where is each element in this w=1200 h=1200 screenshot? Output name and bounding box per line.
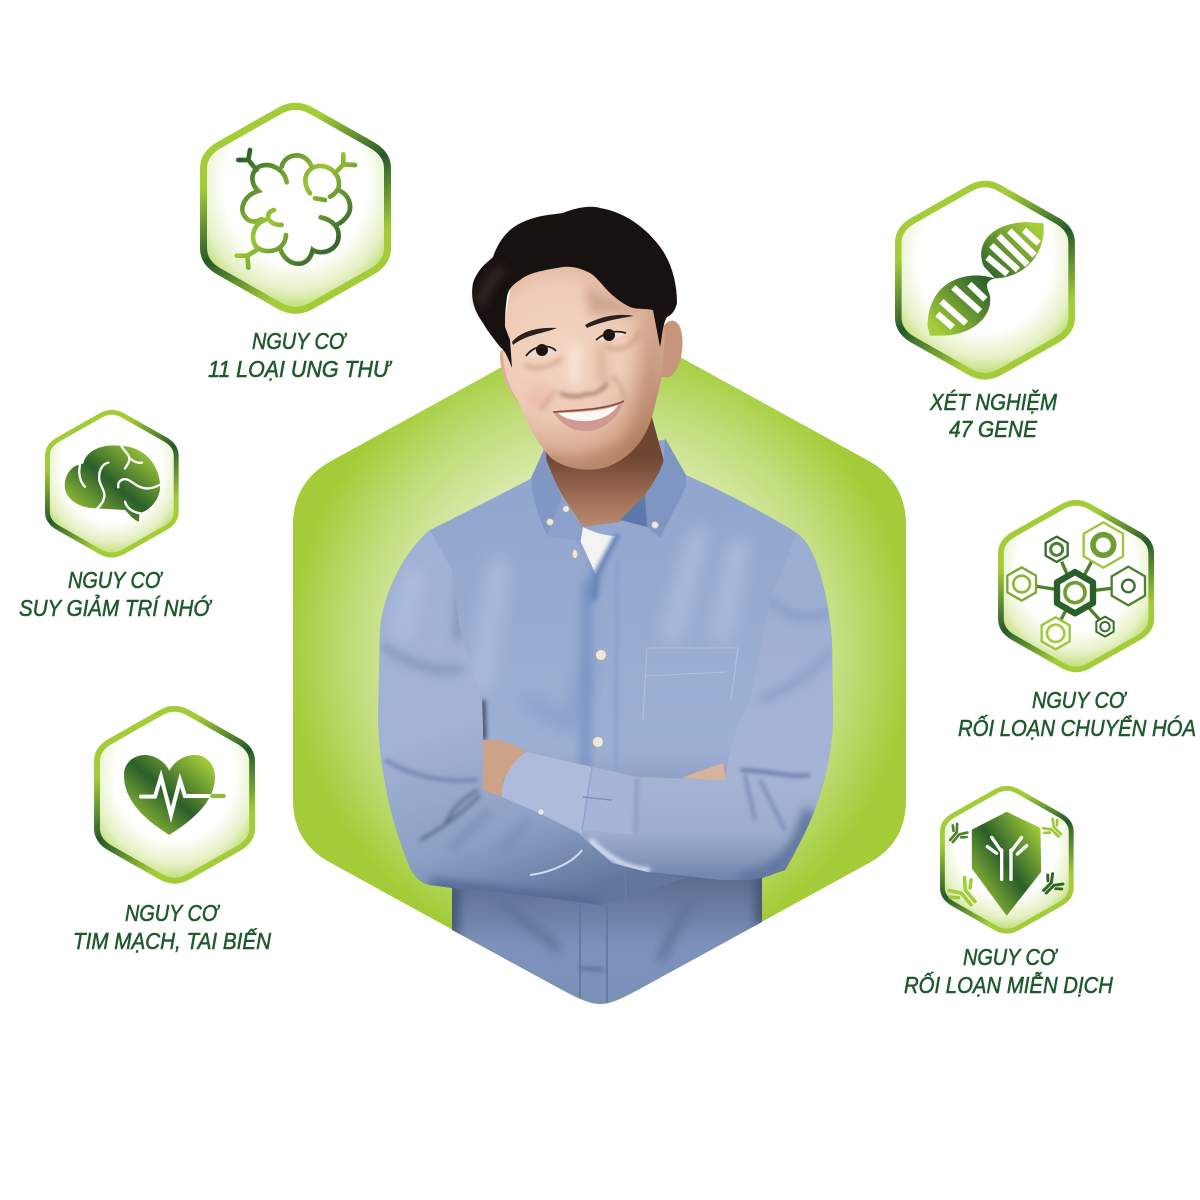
mouth bbox=[553, 401, 624, 431]
pocket bbox=[643, 648, 738, 720]
hexagon badge bbox=[898, 184, 1072, 376]
face bbox=[503, 250, 665, 470]
eyebrows bbox=[512, 315, 634, 345]
hair bbox=[472, 207, 677, 368]
panel: 47 gene test bbox=[898, 184, 1072, 442]
label: SUY GIẢM TRÍ NHỚ bbox=[19, 593, 213, 621]
left ear bbox=[500, 349, 522, 402]
label: NGUY CƠ bbox=[68, 567, 164, 593]
head bbox=[472, 207, 682, 473]
label bbox=[73, 900, 271, 954]
hexagon badge bbox=[942, 788, 1071, 931]
panel: memory decline risk bbox=[19, 412, 213, 621]
collar bbox=[531, 438, 686, 600]
hexagon badge bbox=[47, 412, 176, 555]
label: NGUY CƠ bbox=[1032, 687, 1128, 713]
white undershirt bbox=[580, 526, 616, 575]
label: XÉT NGHIỆM bbox=[929, 389, 1058, 415]
icon: molecule network bbox=[1007, 522, 1145, 649]
panel: cancer risk bbox=[204, 106, 393, 382]
panel: immune disorder risk bbox=[904, 788, 1113, 998]
label: NGUY CƠ bbox=[125, 900, 221, 926]
cuff bbox=[502, 752, 592, 834]
hexagon badge bbox=[204, 106, 388, 310]
icon: shield with antibodies bbox=[945, 812, 1066, 915]
panel: metabolic disorder risk bbox=[958, 503, 1196, 741]
label bbox=[19, 567, 213, 621]
sleeve: right arm over bbox=[502, 533, 833, 880]
nose bbox=[560, 383, 607, 396]
right hand bbox=[682, 763, 726, 781]
label: RỐI LOẠN MIỄN DỊCH bbox=[904, 970, 1113, 998]
label bbox=[958, 687, 1196, 741]
hexagon badge bbox=[1001, 503, 1151, 669]
label: 47 GENE bbox=[949, 416, 1038, 442]
icon: DNA helix bbox=[928, 222, 1044, 336]
left hand bbox=[483, 740, 527, 797]
label: TIM MẠCH, TAI BIẾN bbox=[73, 927, 271, 954]
label bbox=[929, 389, 1058, 442]
label bbox=[904, 944, 1113, 998]
icon: brain bbox=[65, 445, 160, 522]
label bbox=[208, 328, 393, 382]
label: NGUY CƠ bbox=[252, 328, 348, 354]
label: 11 LOẠI UNG THƯ bbox=[208, 356, 393, 382]
panel: cardiovascular and stroke risk bbox=[73, 709, 271, 954]
shirt torso bbox=[378, 440, 833, 1004]
sleeve: left arm bbox=[378, 530, 685, 905]
large green hexagon bbox=[293, 324, 906, 1004]
eyes bbox=[526, 332, 626, 357]
label: NGUY CƠ bbox=[963, 944, 1059, 970]
neck bbox=[545, 410, 665, 527]
icon: tumor cell with antibodies bbox=[237, 150, 355, 268]
icon: heart with pulse bbox=[124, 755, 224, 835]
right ear bbox=[660, 321, 682, 377]
buttons bbox=[546, 506, 659, 748]
person: smiling man with crossed arms bbox=[378, 207, 833, 1004]
hexagon badge bbox=[97, 709, 252, 881]
